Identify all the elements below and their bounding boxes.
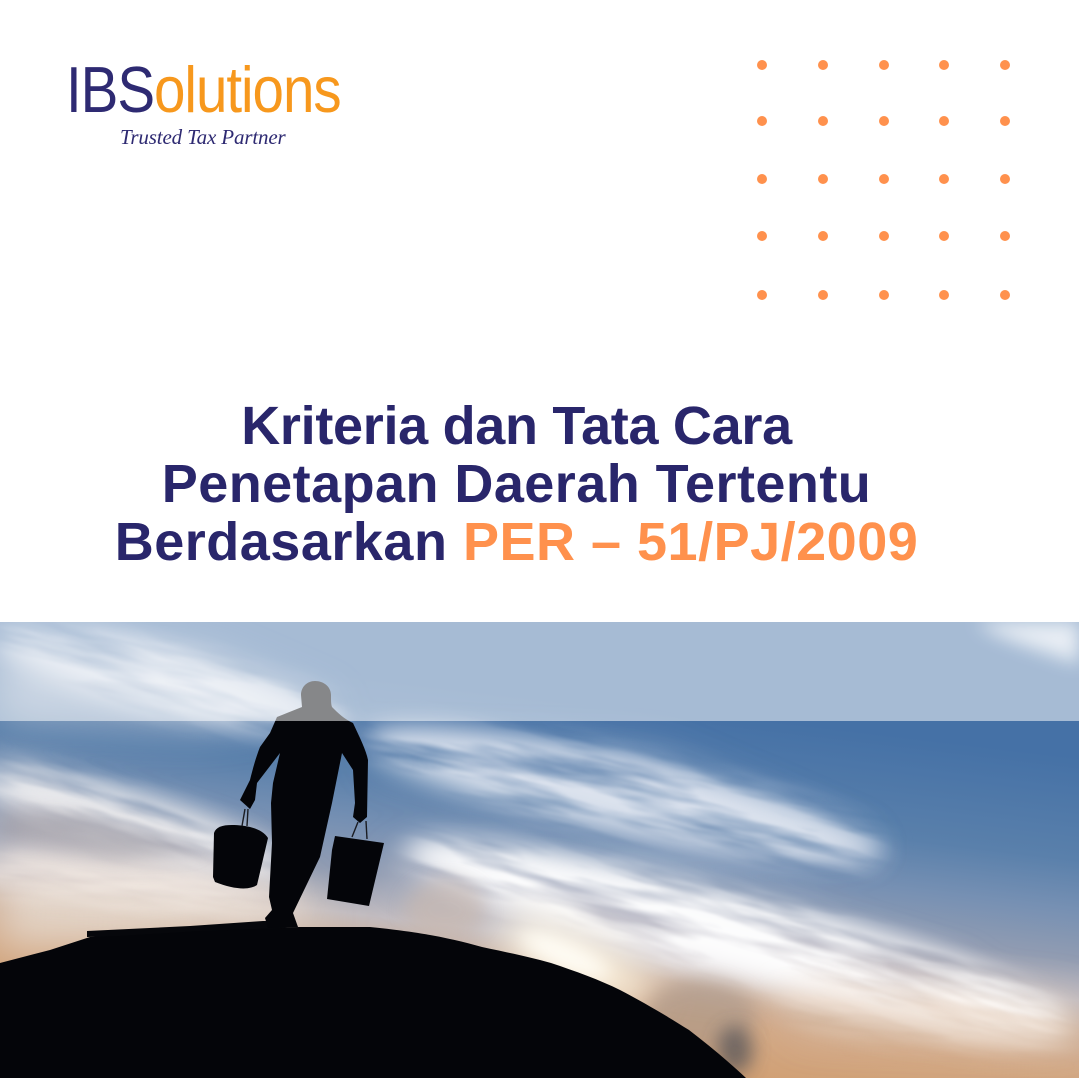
- man silhouette: [213, 681, 384, 928]
- photo: silhouette of man carrying buckets at dusk: [0, 622, 1079, 1078]
- title line 1: Kriteria dan Tata Cara: [241, 396, 792, 456]
- logo tagline: Trusted Tax Partner: [120, 125, 286, 149]
- dust plume: [405, 880, 755, 1074]
- clouds: [0, 605, 1079, 1062]
- logo: [66, 53, 341, 149]
- man body: [240, 681, 368, 928]
- sunset glow: [487, 904, 663, 1020]
- bucket handles: [242, 809, 367, 839]
- logo wordmark: IBSolutions: [66, 53, 341, 126]
- left bucket: [213, 825, 268, 888]
- top-right cloud: [975, 622, 1079, 664]
- grey streak on the left: [0, 812, 207, 858]
- right bucket: [327, 836, 384, 906]
- title: [115, 396, 918, 572]
- translucent light band: [0, 622, 1079, 721]
- hill: [0, 927, 746, 1078]
- plank: [87, 921, 285, 937]
- dot grid decoration: [757, 60, 1010, 300]
- title line 2: Penetapan Daerah Tertentu: [162, 454, 871, 514]
- title line 3: Berdasarkan PER – 51/PJ/2009: [115, 512, 918, 572]
